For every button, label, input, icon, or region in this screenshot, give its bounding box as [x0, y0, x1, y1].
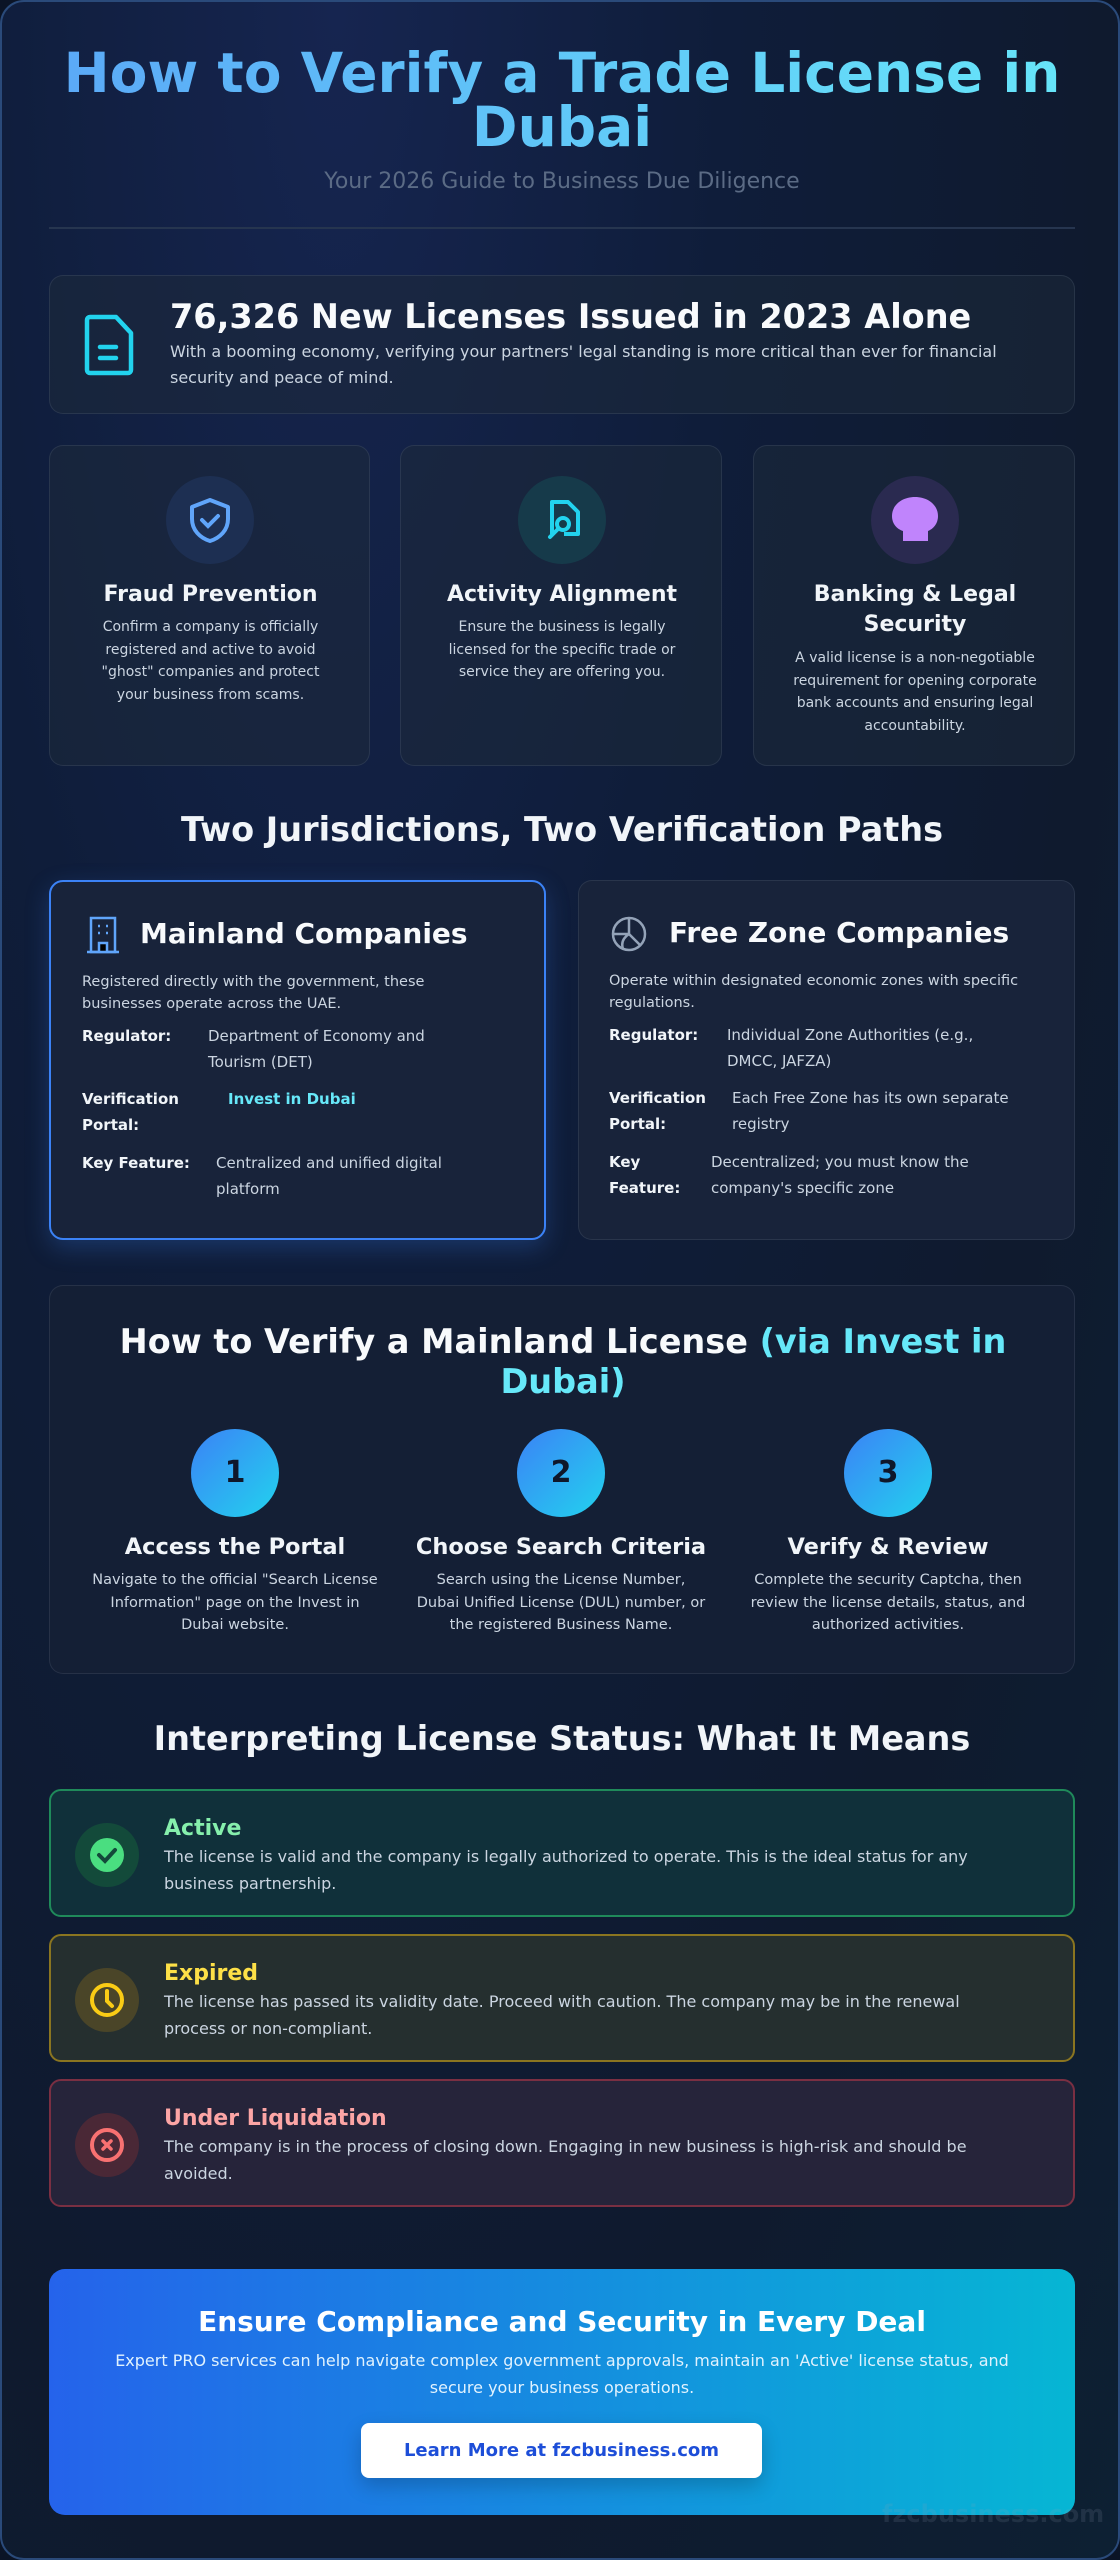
icon: bubble	[871, 476, 959, 564]
row portal	[82, 1090, 356, 1134]
desc: Registered directly with the government, these businesses operate across the UAE.	[82, 974, 424, 1012]
cta text: Expert PRO services can help navigate complex government approvals, maintain an 'Active' license status, and secure your business operations.	[115, 2351, 1009, 2397]
button	[361, 2423, 762, 2478]
number circle	[844, 1429, 932, 1517]
icon: clock	[75, 1968, 139, 2032]
desc: The license has passed its validity date. Proceed with caution. The company may be in the renewal process or non-compliant.	[164, 1992, 960, 2038]
panel: steps	[49, 1285, 1075, 1674]
button: Learn More at fzcbusiness.com	[404, 2440, 719, 2461]
cta panel	[49, 2269, 1075, 2515]
step 2	[416, 1429, 706, 1633]
icon: file search	[518, 476, 606, 564]
row feature: Decentralized; you must know the company's specific zone	[711, 1153, 969, 1197]
desc: Ensure the business is legally licensed for the specific trade or service they are offering you.	[449, 619, 675, 680]
step 1	[92, 1429, 378, 1633]
title: Under Liquidation	[164, 2106, 387, 2131]
row regulator	[82, 1027, 425, 1071]
row portal: Verification Portal:	[609, 1089, 706, 1133]
row feature: Key Feature:	[82, 1154, 190, 1172]
icon: check	[75, 1823, 139, 1887]
step 3	[751, 1429, 1025, 1633]
status: active	[49, 1789, 1075, 1917]
row portal	[609, 1089, 1009, 1133]
row regulator: Regulator:	[609, 1026, 698, 1044]
cta heading: Ensure Compliance and Security in Every Deal	[198, 2305, 926, 2338]
desc: Operate within designated economic zones with specific regulations.	[609, 973, 1018, 1011]
heading: How to Verify a Mainland License (via Invest in	[120, 1322, 1006, 1361]
desc: Navigate to the official "Search License Information" page on the Invest in Dubai website.	[92, 1572, 378, 1633]
row portal: Verification Portal:	[82, 1090, 179, 1134]
icon: globe	[612, 916, 646, 952]
title: Dubai	[472, 95, 652, 159]
stat text: With a booming economy, verifying your partners' legal standing is more critical than ever for financial security and peace of mind.	[170, 342, 997, 387]
row portal: Each Free Zone has its own separate registry	[732, 1089, 1009, 1133]
desc: The license is valid and the company is legally authorized to operate. This is the ideal status for any business partnership.	[164, 1847, 968, 1893]
icon: x	[75, 2113, 139, 2177]
icon: document	[84, 314, 134, 376]
heading: jurisdictions: Two Jurisdictions, Two Verification Paths	[181, 810, 943, 849]
status: liquidation	[49, 2079, 1075, 2207]
row feature: Centralized and unified digital platform	[216, 1154, 442, 1198]
heading	[120, 1322, 1006, 1401]
number circle: 2	[551, 1455, 571, 1490]
row regulator: Department of Economy and Tourism (DET)	[208, 1027, 425, 1071]
icon: shield	[166, 476, 254, 564]
number circle	[517, 1429, 605, 1517]
number circle	[191, 1429, 279, 1517]
number circle: 1	[225, 1455, 245, 1490]
title: Expired	[164, 1961, 258, 1986]
desc: A valid license is a non-negotiable requirement for opening corporate bank accounts and ensuring legal accountability.	[793, 650, 1037, 734]
heading: Dubai)	[500, 1362, 626, 1401]
stat card	[49, 275, 1075, 414]
number circle: 3	[878, 1455, 898, 1490]
title: Banking & Legal	[814, 582, 1016, 607]
status: expired	[49, 1934, 1075, 2062]
stat heading: 76,326 New Licenses Issued in 2023 Alone	[170, 297, 971, 336]
card: banking	[753, 445, 1075, 766]
row feature	[82, 1154, 442, 1198]
desc: Search using the License Number, Dubai Unified License (DUL) number, or the registered Business Name.	[417, 1572, 705, 1633]
title	[2, 46, 1120, 154]
title: Security	[864, 612, 966, 637]
title: Access the Portal	[125, 1534, 345, 1560]
watermark: fzcbusiness.com	[882, 2500, 1104, 2528]
heading: Free Zone Companies	[669, 916, 1009, 949]
title: Activity Alignment	[447, 582, 677, 607]
subtitle: Your 2026 Guide to Business Due Diligence	[324, 169, 800, 194]
card: fraud prevention	[49, 445, 370, 766]
title: Verify & Review	[787, 1534, 988, 1560]
title: Fraud Prevention	[103, 582, 318, 607]
card: activity alignment	[400, 445, 722, 766]
title	[814, 582, 1016, 637]
desc: Confirm a company is officially registered and active to avoid "ghost" companies and protect your business from scams.	[102, 619, 319, 702]
panel: mainland	[49, 880, 546, 1240]
row regulator	[609, 1026, 973, 1070]
heading: status: Interpreting License Status: What It Means	[154, 1719, 970, 1758]
row feature: Key Feature:	[609, 1153, 680, 1197]
row regulator: Regulator:	[82, 1027, 171, 1045]
panel: free zone	[578, 880, 1075, 1240]
heading: Mainland Companies	[140, 917, 468, 950]
desc: Complete the security Captcha, then review the license details, status, and authorized activities.	[751, 1572, 1025, 1633]
row regulator: Individual Zone Authorities (e.g., DMCC, JAFZA)	[727, 1026, 973, 1070]
title: Choose Search Criteria	[416, 1534, 706, 1560]
title: How to Verify a Trade License in	[64, 41, 1060, 105]
title: Active	[164, 1816, 241, 1841]
row portal: Invest in Dubai	[228, 1090, 356, 1108]
desc: The company is in the process of closing down. Engaging in new business is high-risk and should be avoided.	[164, 2137, 967, 2183]
icon: building	[87, 916, 119, 954]
